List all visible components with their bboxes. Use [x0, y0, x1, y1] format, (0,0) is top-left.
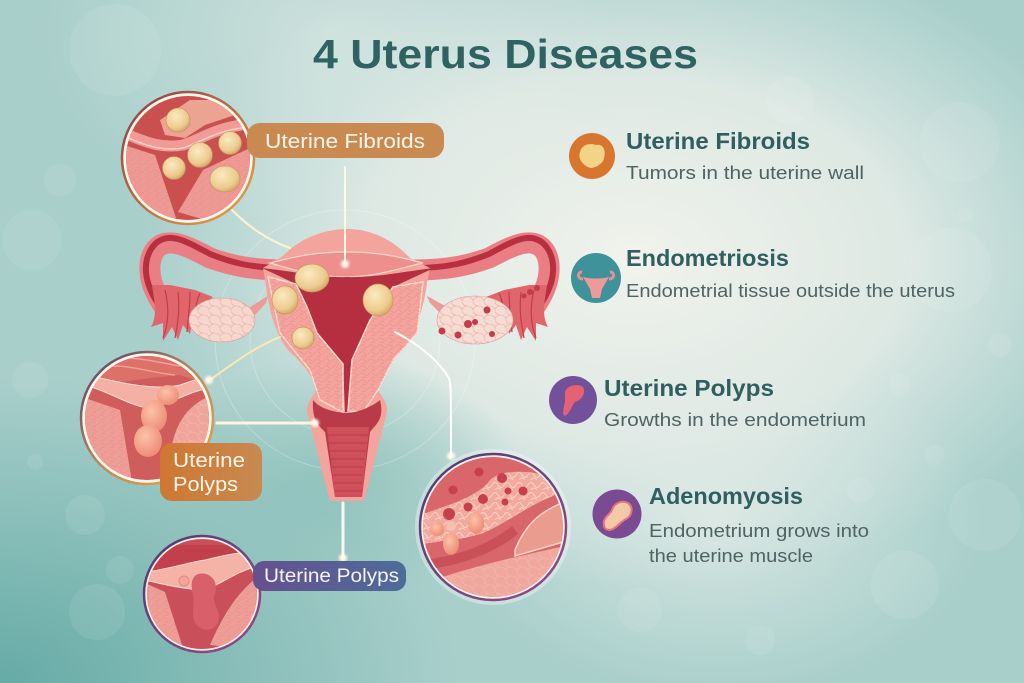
- right ovary with lesions: [427, 285, 540, 344]
- inset: uterine polyps upper: [80, 350, 215, 485]
- inset: adenomyosis: [418, 452, 570, 605]
- icon: polyp: [549, 376, 597, 424]
- glow points: [205, 260, 455, 562]
- legend item: adenomyosis: the uterine muscle: [649, 546, 813, 566]
- left myometrium texture: [268, 277, 343, 412]
- legend item: adenomyosis: [592, 483, 869, 566]
- cervix and vaginal canal: [313, 400, 381, 497]
- right myometrium: [348, 282, 423, 412]
- legend item: adenomyosis: Endometrium grows into: [649, 521, 869, 541]
- label: uterine polyps pill: [253, 561, 406, 591]
- icon: adenomyosis: [592, 490, 642, 538]
- fundus muscle band: [270, 252, 423, 277]
- legend item: uterine fibroids: Uterine Fibroids: [626, 128, 810, 154]
- icon: fibroid: [569, 133, 615, 179]
- left myometrium: [268, 277, 343, 412]
- legend item: uterine polyps: Growths in the endometrium: [604, 410, 866, 430]
- right fallopian tube and fimbriae: [414, 238, 553, 341]
- uterine cavity: [262, 268, 434, 412]
- legend item: uterine fibroids: Tumors in the uterine wall: [626, 163, 864, 183]
- connector lines: [210, 167, 451, 558]
- title: 4 Uterus Diseases: [313, 31, 698, 77]
- left ovary: [189, 296, 268, 342]
- label: uterine polyps box: Uterine: [173, 450, 245, 472]
- label: uterine polyps box: Polyps: [173, 474, 238, 496]
- legend item: uterine fibroids: [569, 128, 864, 183]
- legend item: uterine polyps: Uterine Polyps: [604, 375, 774, 401]
- uterine body: [263, 229, 430, 501]
- label: uterine fibroids: [247, 123, 444, 158]
- right myometrium texture: [348, 282, 423, 412]
- legend item: endometriosis: Endometriosis: [626, 245, 789, 271]
- inset: uterine fibroids: [120, 90, 260, 230]
- left fallopian tube and fimbriae: [146, 238, 285, 341]
- inset: uterine polyps lower: [140, 535, 265, 655]
- fibroids: [272, 264, 393, 349]
- label: uterine fibroids: Uterine Fibroids: [265, 131, 425, 153]
- legend item: endometriosis: [571, 245, 955, 303]
- label: uterine polyps box: [160, 443, 262, 501]
- legend item: endometriosis: Endometrial tissue outside the uterus: [626, 281, 955, 301]
- label: uterine polyps pill: Uterine Polyps: [264, 566, 399, 587]
- icon: uterus: [571, 253, 621, 303]
- legend item: uterine polyps: [549, 375, 866, 430]
- uterus illustration: [146, 229, 553, 501]
- legend item: adenomyosis: Adenomyosis: [649, 483, 803, 509]
